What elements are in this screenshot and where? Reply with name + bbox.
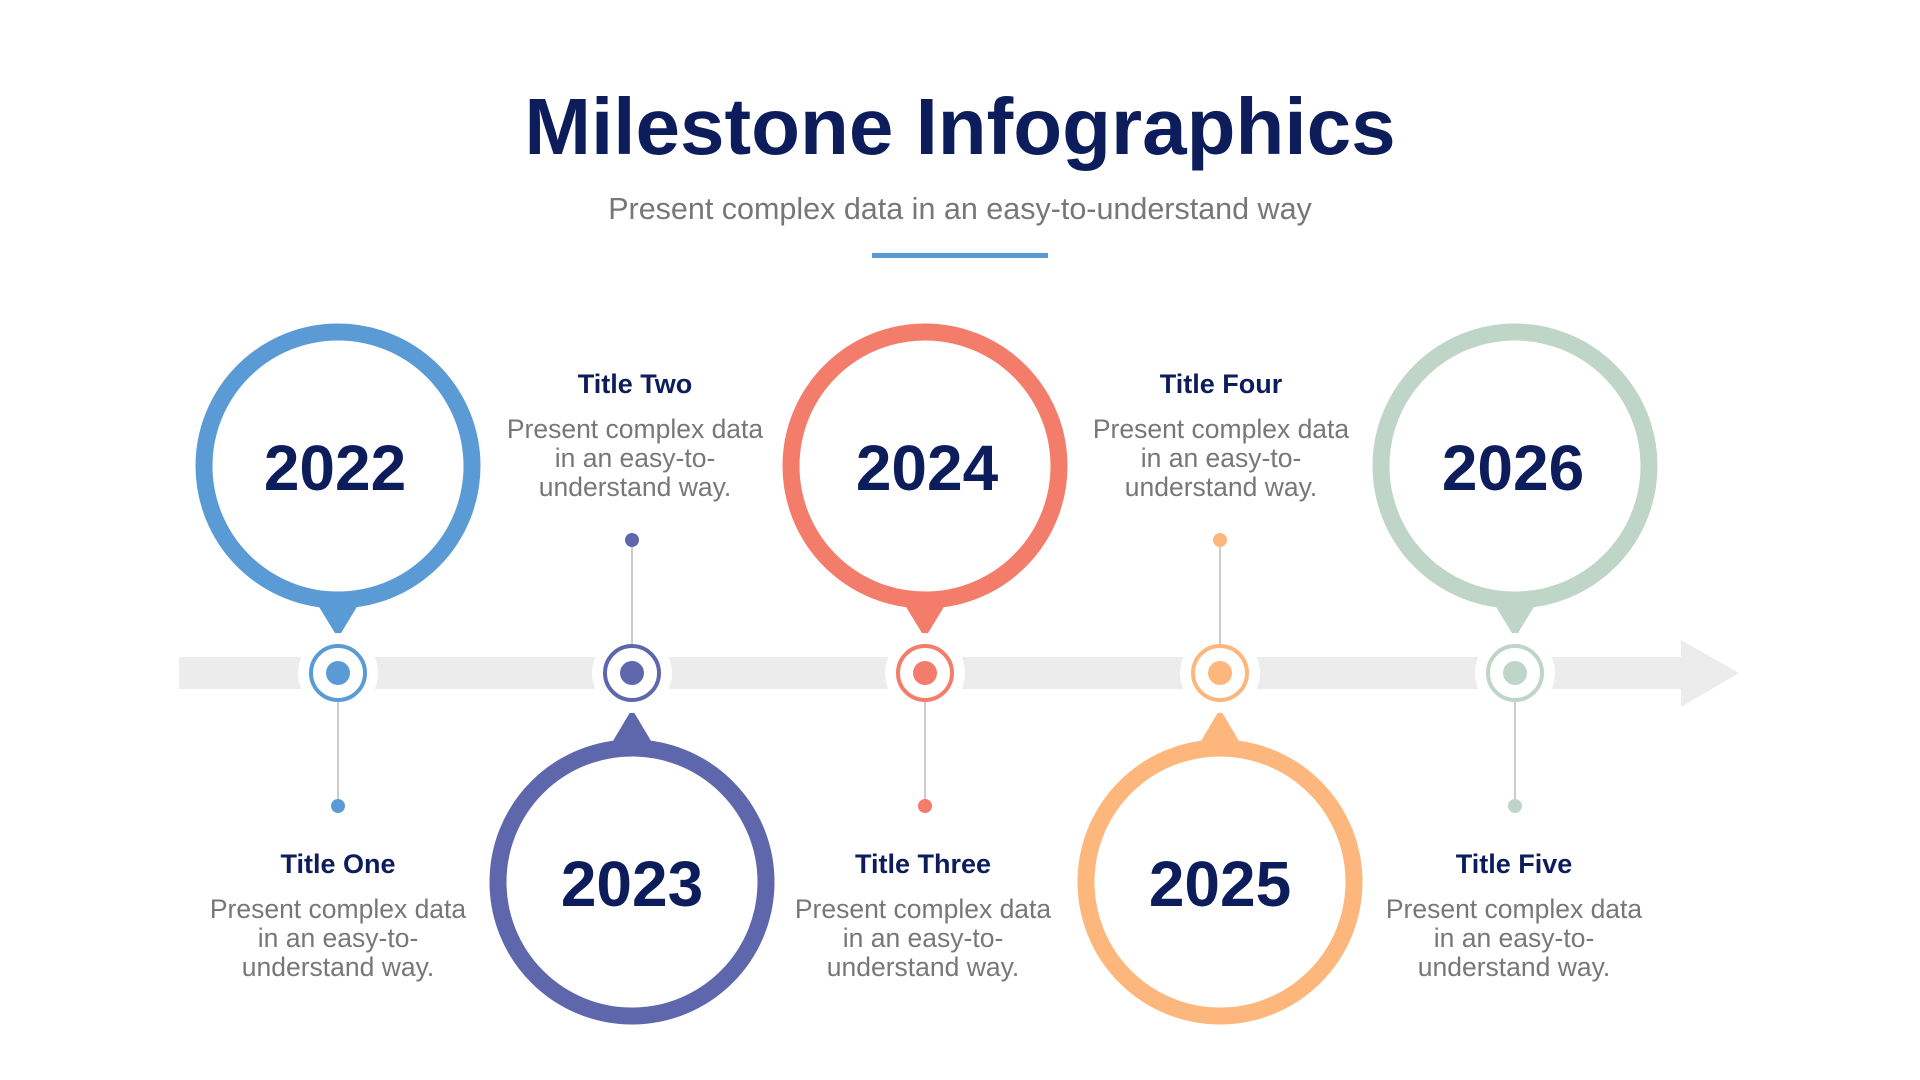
title: Milestone Infographics (524, 82, 1396, 171)
milestone 2025: Present complex data (1093, 414, 1349, 444)
milestone 2024: understand way. (827, 952, 1019, 982)
milestone 2024 (791, 332, 1059, 982)
underline accent (872, 253, 1048, 258)
milestone 2022: Title One (280, 849, 396, 879)
milestone 2026: understand way. (1418, 952, 1610, 982)
milestone 2022: understand way. (242, 952, 434, 982)
milestone 2023 (498, 369, 766, 1016)
milestone 2025: 2025 (1149, 848, 1291, 920)
milestone 2024: 2024 (856, 432, 999, 504)
milestone 2026 (1381, 332, 1649, 982)
milestone 2026: 2026 (1442, 432, 1584, 504)
milestone 2023: 2023 (561, 848, 703, 920)
milestone 2025: Title Four (1160, 369, 1283, 399)
milestone 2026: in an easy-to- (1434, 923, 1594, 953)
milestone 2022: in an easy-to- (258, 923, 418, 953)
milestone 2023: understand way. (539, 472, 731, 502)
milestone 2024: Present complex data (795, 894, 1051, 924)
milestone 2025: understand way. (1125, 472, 1317, 502)
milestone 2023: Title Two (578, 369, 692, 399)
milestone 2024: Title Three (855, 849, 991, 879)
milestone 2022: 2022 (264, 432, 406, 504)
milestone 2024: in an easy-to- (843, 923, 1003, 953)
milestone 2022 (204, 332, 472, 982)
milestone 2023: in an easy-to- (555, 443, 715, 473)
milestone 2023: Present complex data (507, 414, 763, 444)
subtitle: Present complex data in an easy-to-understand way (608, 192, 1313, 226)
timeline arrow (179, 640, 1739, 707)
milestone 2025 (1086, 369, 1354, 1016)
milestone 2025: in an easy-to- (1141, 443, 1301, 473)
milestone 2026: Present complex data (1386, 894, 1642, 924)
milestone 2026: Title Five (1456, 849, 1572, 879)
milestone 2022: Present complex data (210, 894, 466, 924)
